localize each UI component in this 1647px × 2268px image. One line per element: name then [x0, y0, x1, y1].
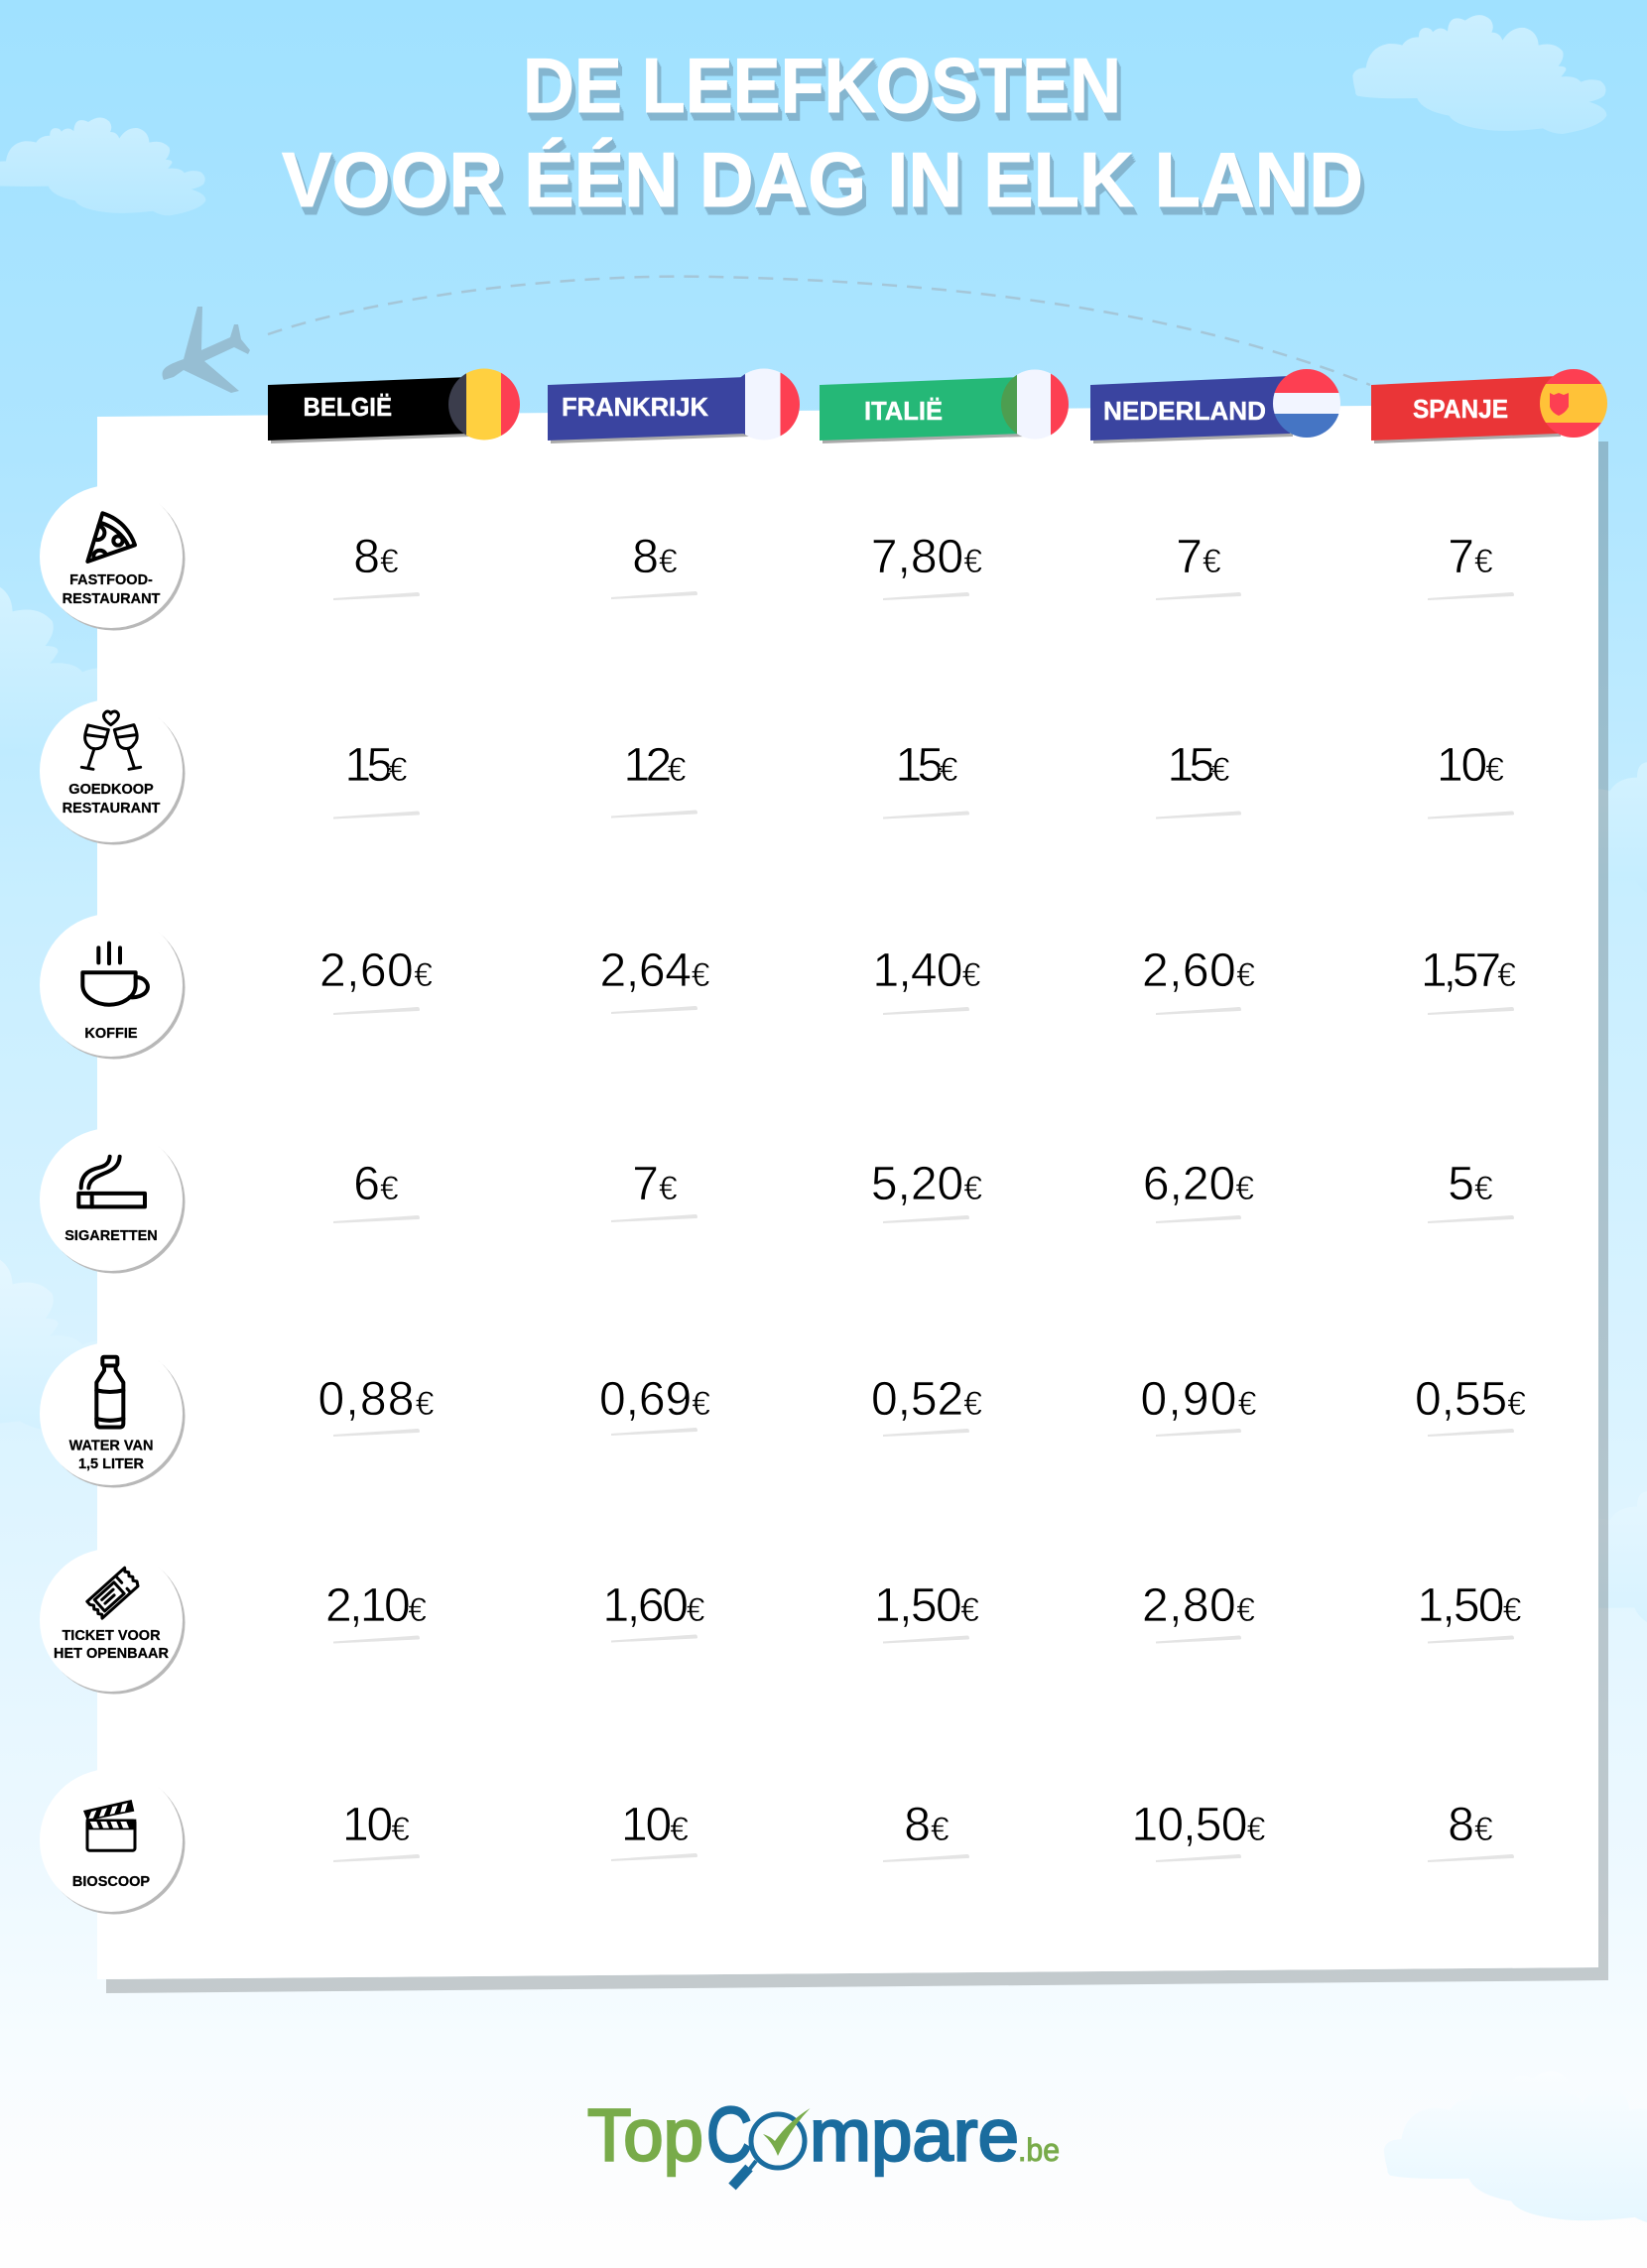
- title line 2 shadow: VOOR ÉÉN DAG IN ELK LAND: [285, 142, 1366, 229]
- row: fastfood-restaurant prices: 7€: [1448, 531, 1493, 583]
- row: koffie prices: 2,60€: [319, 945, 433, 997]
- row label: water van 1,5 liter: 1,5 LITER: [78, 1456, 145, 1472]
- row label: goedkoop restaurant: GOEDKOOP: [68, 782, 154, 798]
- panel shadow: [106, 441, 1608, 1993]
- row label: koffie: KOFFIE: [84, 1026, 138, 1042]
- row: goedkoop restaurant prices: 15€: [1167, 739, 1230, 792]
- logo: TopCompare.be: .be: [1018, 2132, 1060, 2168]
- title line 1 shadow: DE LEEFKOSTEN: [525, 46, 1123, 133]
- country tag: Italië: ITALIË: [864, 396, 943, 426]
- row label: goedkoop restaurant: RESTAURANT: [63, 801, 161, 817]
- row: bioscoop prices: 8€: [1448, 1799, 1493, 1851]
- row: koffie prices: 2,64€: [599, 945, 710, 997]
- flight path dashed arc: [268, 277, 1370, 385]
- title line 2 shadow: VOOR ÉÉN DAG IN ELK LAND: [283, 138, 1364, 225]
- row: ticket prices: 1,50€: [874, 1579, 979, 1632]
- row label: sigaretten: SIGARETTEN: [64, 1228, 158, 1244]
- icon: coffee cup: [82, 944, 148, 1005]
- row: sigaretten prices: 6€: [353, 1158, 399, 1210]
- logo: TopCompare.be: [587, 2090, 1060, 2187]
- row: sigaretten prices: 7€: [632, 1158, 678, 1210]
- icon: pizza: [87, 513, 135, 562]
- row: bioscoop prices: 10,50€: [1131, 1799, 1266, 1851]
- title line 1 shadow: DE LEEFKOSTEN: [524, 44, 1122, 131]
- panel: white price table: [97, 404, 1598, 1979]
- flag: France: [740, 369, 800, 441]
- title line 1: DE LEEFKOSTEN: [523, 42, 1121, 129]
- country tag: Nederland: NEDERLAND: [1103, 396, 1266, 426]
- country tag: Spanje: [1371, 367, 1608, 443]
- row: water prices: [317, 1373, 1526, 1437]
- row label: bioscoop: [40, 1769, 185, 1915]
- row: sigaretten prices: 6,20€: [1143, 1158, 1254, 1210]
- row: goedkoop restaurant prices: 10€: [1437, 739, 1504, 792]
- country tag: Frankrijk: [548, 367, 800, 443]
- row: sigaretten prices: 5,20€: [871, 1158, 982, 1210]
- cloud: bottom right: [1384, 2072, 1647, 2224]
- row label: ticket voor het openbaar: TICKET VOOR: [62, 1628, 161, 1644]
- row label: fastfood-restaurant: FASTFOOD-: [69, 572, 153, 588]
- cloud: right upper: [1528, 741, 1647, 938]
- icon: wine glasses: [81, 711, 141, 769]
- cloud: left middle: [0, 1234, 125, 1431]
- flag: Spain: [1539, 367, 1608, 440]
- country tag: Italië: [820, 367, 1071, 443]
- row: ticket prices: 2,80€: [1142, 1579, 1255, 1632]
- row: water prices: 0,55€: [1415, 1373, 1526, 1426]
- row: water prices: 0,69€: [599, 1373, 710, 1426]
- row: ticket prices: [325, 1579, 1522, 1643]
- flag: Italy: [1001, 369, 1069, 439]
- row: goedkoop restaurant prices: 15€: [895, 739, 958, 792]
- country tag: Frankrijk: FRANKRIJK: [562, 392, 708, 422]
- row: fastfood-restaurant prices: 7€: [1176, 531, 1221, 583]
- icon: magnifier: [732, 2114, 805, 2187]
- country tag: Nederland: [1090, 367, 1341, 443]
- row: fastfood-restaurant prices: 7,80€: [871, 531, 982, 583]
- title: [282, 42, 1367, 231]
- row: sigaretten prices: [333, 1158, 1514, 1223]
- row label: fastfood-restaurant: [40, 485, 185, 631]
- country tag: België: BELGIË: [304, 392, 392, 422]
- row label: ticket voor het openbaar: [40, 1549, 185, 1695]
- row label: sigaretten: [40, 1128, 185, 1274]
- country tag: België: [268, 367, 521, 443]
- row label: ticket voor het openbaar: HET OPENBAAR: [54, 1646, 170, 1662]
- row: bioscoop prices: 10€: [342, 1799, 410, 1851]
- row: ticket prices: 2,10€: [325, 1579, 427, 1632]
- icon: plane: [163, 307, 250, 393]
- icon: cigarette: [78, 1157, 145, 1206]
- flag: Belgium: [448, 367, 521, 442]
- row: water prices: 0,90€: [1141, 1373, 1257, 1426]
- row: ticket prices: 1,60€: [603, 1579, 705, 1632]
- row label: fastfood-restaurant: RESTAURANT: [63, 591, 161, 607]
- cloud: right lower: [1528, 1470, 1647, 1667]
- row: ticket prices: 1,50€: [1417, 1579, 1522, 1632]
- row: goedkoop restaurant prices: [333, 739, 1514, 819]
- row: fastfood-restaurant prices: 8€: [632, 531, 678, 583]
- title line 2 shadow: VOOR ÉÉN DAG IN ELK LAND: [286, 144, 1367, 231]
- icon: ticket: [87, 1568, 140, 1618]
- row: water prices: 0,88€: [317, 1373, 435, 1426]
- row: fastfood-restaurant prices: [333, 531, 1514, 600]
- row: fastfood-restaurant prices: 8€: [353, 531, 399, 583]
- logo: TopCompare.be: Top: [587, 2093, 703, 2177]
- row: koffie prices: 1,40€: [873, 945, 981, 997]
- row label: koffie: [40, 914, 185, 1060]
- row: goedkoop restaurant prices: 12€: [623, 739, 687, 792]
- row: bioscoop prices: 10€: [621, 1799, 689, 1851]
- title line 1 shadow: DE LEEFKOSTEN: [527, 50, 1125, 137]
- row: goedkoop restaurant prices: 15€: [345, 739, 408, 792]
- country tag: Spanje: SPANJE: [1413, 394, 1508, 424]
- row: bioscoop prices: 8€: [904, 1799, 950, 1851]
- row: bioscoop prices: [333, 1799, 1514, 1862]
- row: koffie prices: 2,60€: [1142, 945, 1255, 997]
- cloud: top left: [0, 118, 205, 215]
- row label: goedkoop restaurant: [40, 699, 185, 845]
- flag: Netherlands: [1272, 367, 1341, 440]
- row: sigaretten prices: 5€: [1448, 1158, 1493, 1210]
- logo: TopCompare.be: mpare: [810, 2093, 1019, 2177]
- title line 1 shadow: DE LEEFKOSTEN: [526, 48, 1124, 135]
- title line 2 shadow: VOOR ÉÉN DAG IN ELK LAND: [284, 140, 1365, 227]
- icon: water bottle: [96, 1357, 123, 1428]
- icon: clapperboard: [83, 1800, 136, 1850]
- title line 2: VOOR ÉÉN DAG IN ELK LAND: [282, 136, 1363, 223]
- logo: TopCompare.be: C: [706, 2090, 752, 2178]
- row label: water van 1,5 liter: WATER VAN: [69, 1439, 153, 1454]
- cloud: left upper: [0, 562, 125, 758]
- cloud: top right: [1352, 15, 1606, 134]
- row label: bioscoop: BIOSCOOP: [72, 1874, 150, 1890]
- row: koffie prices: [319, 945, 1516, 1015]
- row: water prices: 0,52€: [871, 1373, 982, 1426]
- icon: check mark: [763, 2108, 810, 2156]
- row label: water van 1,5 liter: [40, 1342, 185, 1488]
- row: koffie prices: 1,57€: [1421, 945, 1516, 997]
